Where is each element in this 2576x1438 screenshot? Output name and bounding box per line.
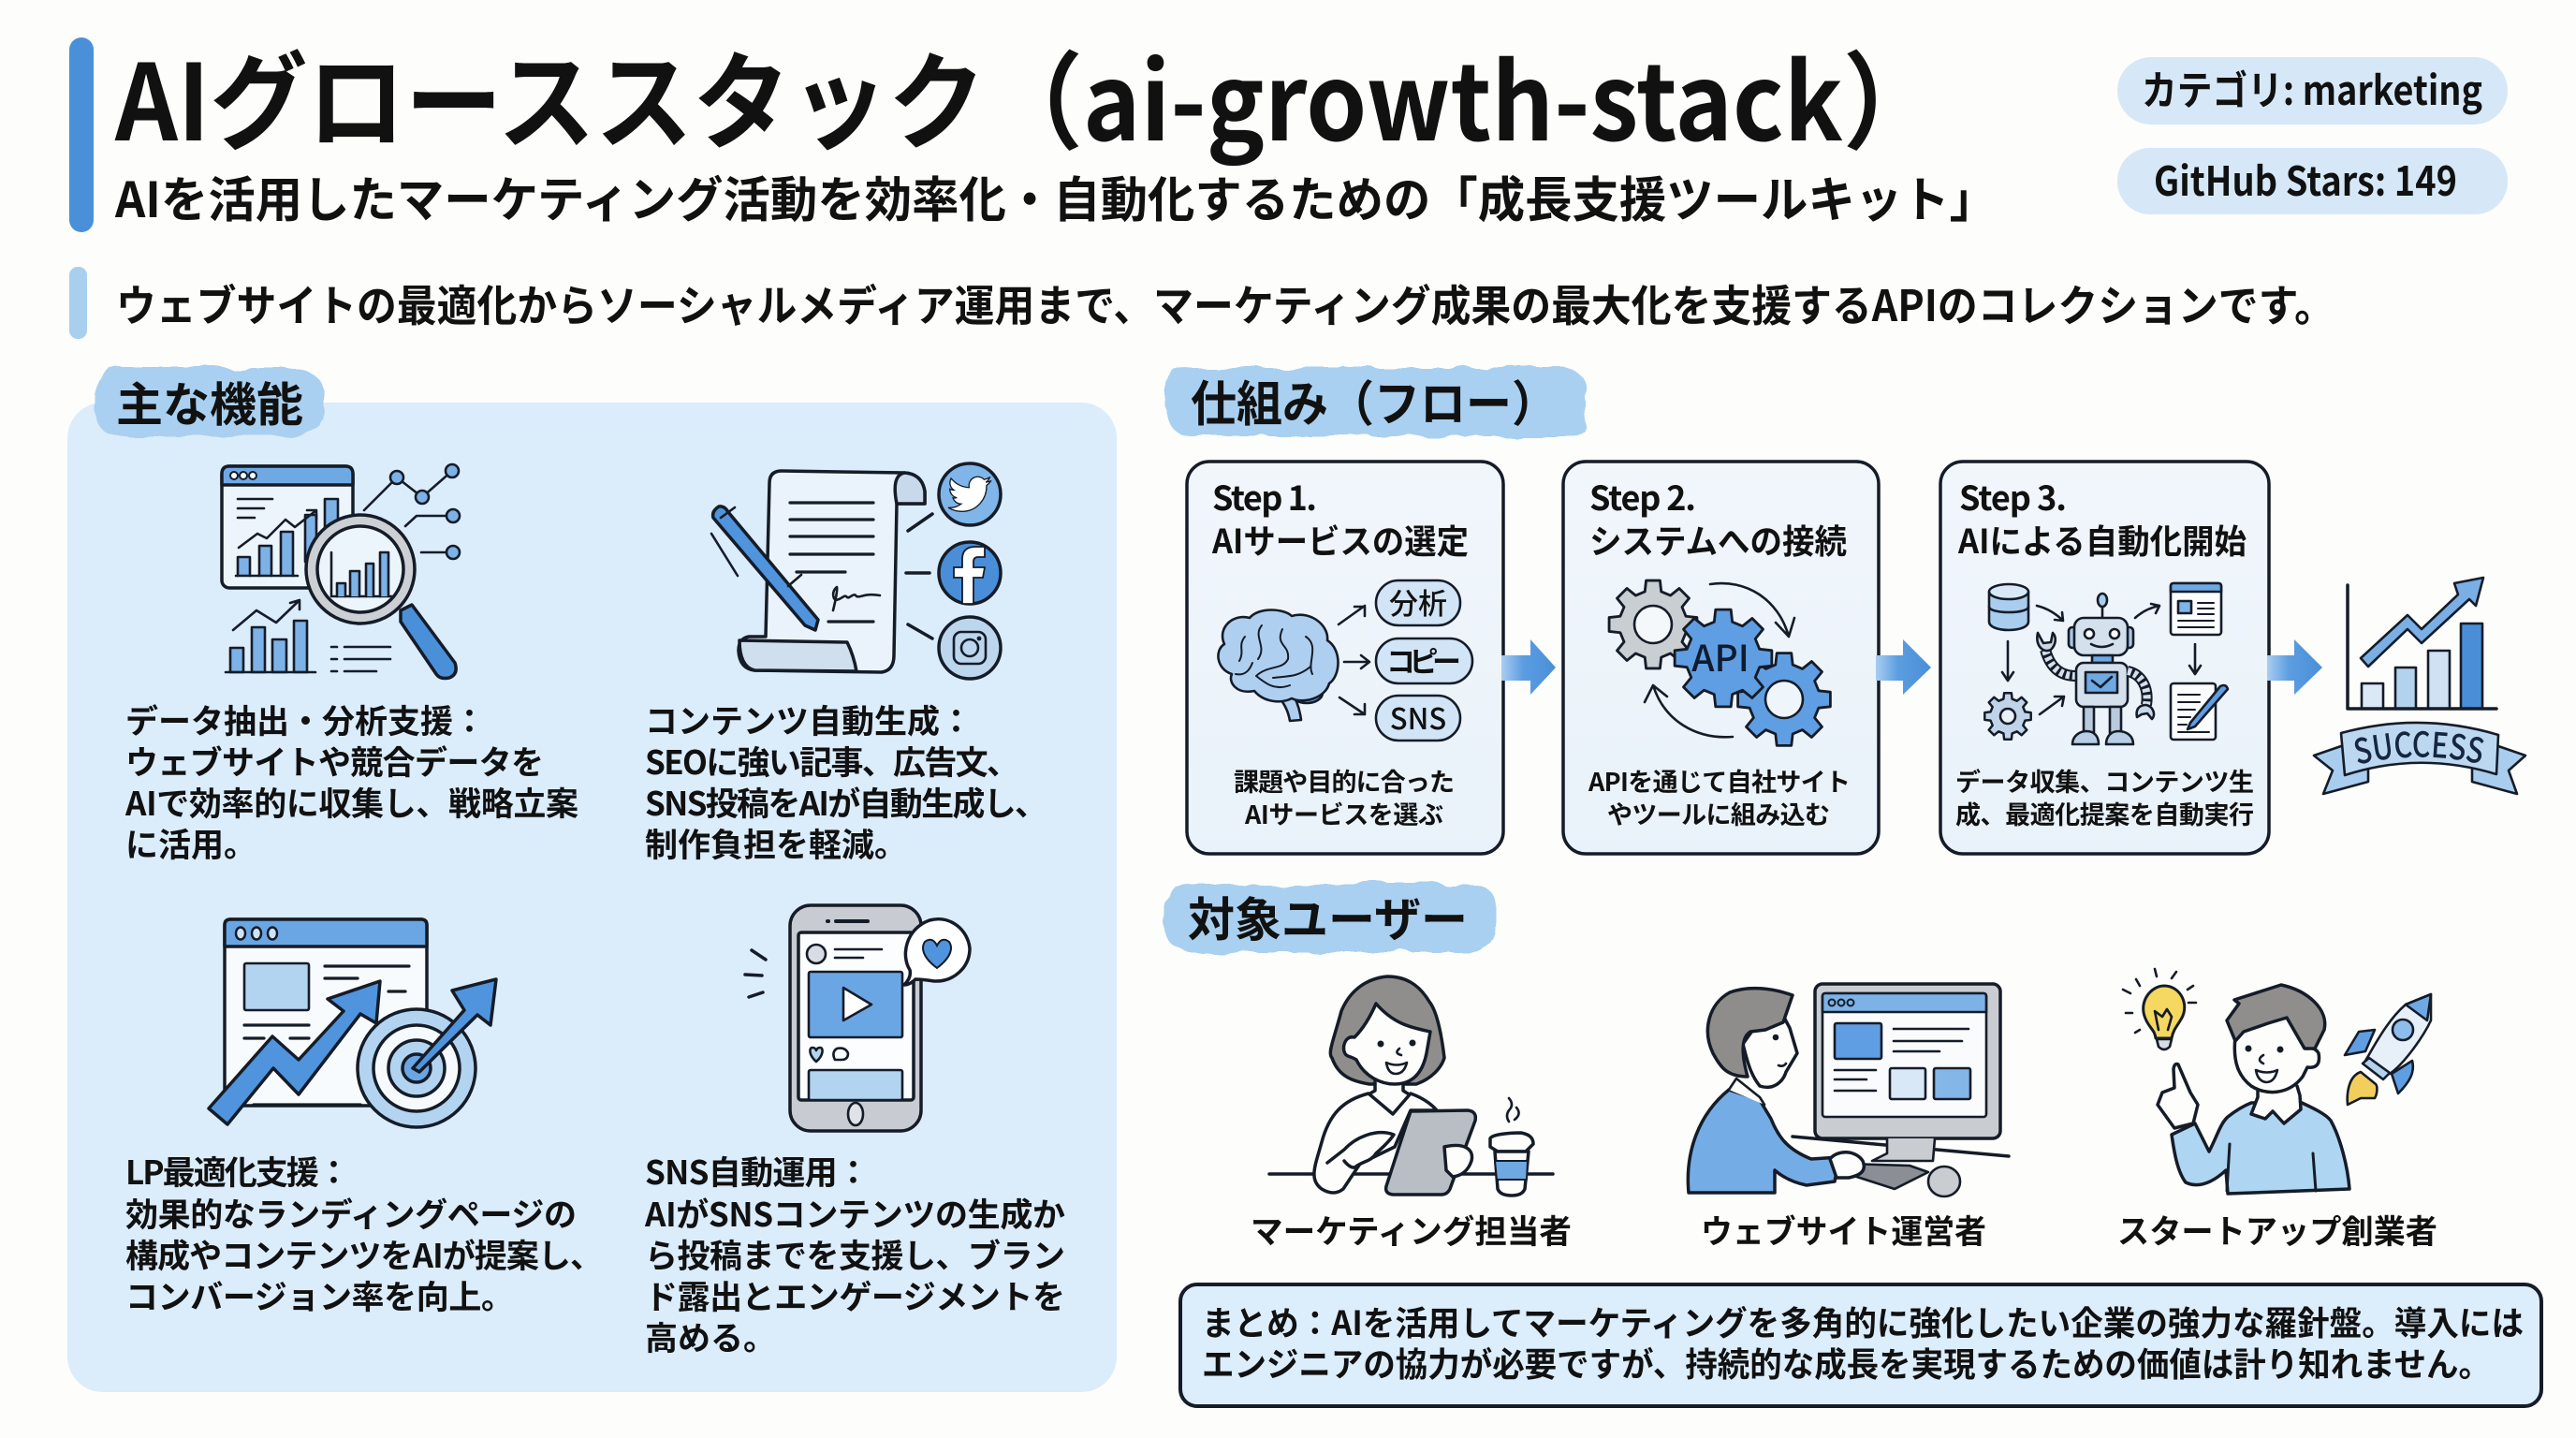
callout: summary: まとめ：AIを活用してマーケティングを多角的に強化したい企業の強力な羅針盤。導入には	[1202, 1297, 2524, 1345]
arrow: step 2 to step 3	[1876, 639, 1931, 695]
feature text: data extraction: に活用。	[125, 819, 256, 867]
step 1 card	[1187, 462, 1503, 854]
icon: brain	[1218, 610, 1339, 721]
feature text: landing page optimisation: 構成やコンテンツをAIが提案し、	[125, 1230, 603, 1278]
icon: robot	[2037, 594, 2154, 744]
step 3 card: 成、最適化提案を自動実行	[1955, 795, 2254, 831]
icon: success chart	[2348, 578, 2496, 709]
user: website operator	[1688, 984, 2009, 1196]
pills: service types: SNS	[1390, 696, 1446, 738]
feature text: social media automation: 高める。	[645, 1313, 776, 1360]
description accent bar	[69, 267, 87, 339]
arrow: step 3 to success	[2267, 639, 2322, 695]
icon: API gears	[1609, 580, 1830, 745]
icon: light bulb	[2123, 969, 2196, 1049]
feature text: data extraction	[124, 696, 578, 867]
step 2 card: APIを通じて自社サイト	[1588, 762, 1851, 799]
step 3 card	[1940, 462, 2269, 854]
step 3 card: Step 3.	[1959, 472, 2067, 521]
icon: database	[1989, 584, 2028, 630]
pills: service types: 分析	[1389, 580, 1447, 623]
callout: summary: エンジニアの協力が必要ですが、持続的な成長を実現するための価値は計り知れません。	[1202, 1338, 2491, 1387]
heading: main features: 主な機能	[116, 368, 303, 435]
feature text: social media automation: ら投稿までを支援し、ブラン	[645, 1230, 1065, 1278]
arrow: step 1 to step 2	[1501, 639, 1556, 695]
feature text: landing page optimisation	[125, 1147, 603, 1319]
step 3 card: データ収集、コンテンツ生	[1955, 762, 2254, 799]
icon: social media automation	[745, 905, 970, 1131]
label: startup founder: スタートアップ創業者	[2117, 1206, 2437, 1254]
feature text: content generation: コンテンツ自動生成：	[645, 696, 973, 743]
icon: API gears: API	[1691, 630, 1749, 682]
ribbon: success	[2312, 721, 2527, 796]
step 2 card: やツールに組み込む	[1607, 795, 1830, 831]
subtitle: AIを活用したマーケティング活動を効率化・自動化するための「成長支援ツールキット」	[114, 161, 1997, 231]
label: marketing manager: マーケティング担当者	[1251, 1206, 1572, 1254]
title: AIグローススタック（ai-growth-stack）	[114, 18, 1940, 171]
title accent bar	[69, 37, 94, 232]
feature text: data extraction: AIで効率的に収集し、戦略立案	[124, 778, 578, 826]
panel: main features	[67, 368, 1117, 1392]
feature text: data extraction: ウェブサイトや競合データを	[125, 737, 544, 785]
feature text: data extraction: データ抽出・分析支援：	[125, 696, 486, 743]
icon: content generation	[711, 463, 1001, 679]
feature text: landing page optimisation: 効果的なランディングページの	[125, 1189, 577, 1237]
step 1 card: AIサービスの選定	[1211, 515, 1469, 564]
feature text: social media automation	[644, 1147, 1065, 1360]
user: marketing manager	[1269, 976, 1553, 1196]
feature text: content generation: SNS投稿をAIが自動生成し、	[645, 778, 1047, 826]
feature text: social media automation: SNS自動運用：	[645, 1147, 870, 1195]
arrows: automation flow	[2002, 604, 2201, 714]
heading: how it works: 仕組み（フロー）	[1191, 365, 1558, 435]
icon: landing page optimisation	[209, 919, 496, 1127]
icon: data analysis	[222, 464, 460, 678]
ribbon: success: SUCCESS	[2355, 730, 2484, 764]
step 1 card: Step 1.	[1212, 472, 1317, 521]
step 2 card: Step 2.	[1589, 472, 1696, 521]
step 2 card: システムへの接続	[1589, 515, 1847, 564]
feature text: landing page optimisation: コンバージョン率を向上。	[125, 1271, 514, 1319]
description: ウェブサイトの最適化からソーシャルメディア運用まで、マーケティング成果の最大化を支援するAPIのコレクションです。	[116, 272, 2334, 334]
label: website operator: ウェブサイト運営者	[1701, 1206, 1986, 1254]
pills: service types: コピー	[1386, 638, 1461, 681]
icon: document with pen	[2171, 683, 2228, 740]
heading: target users: 対象ユーザー	[1188, 883, 1468, 950]
feature text: social media automation: ド露出とエンゲージメントを	[645, 1271, 1065, 1319]
user: startup founder	[2123, 969, 2431, 1194]
feature text: content generation: SEOに強い記事、広告文、	[645, 737, 1019, 785]
step 2 card	[1563, 462, 1879, 854]
icon: rocket	[2345, 994, 2431, 1105]
badge: category: カテゴリ: marketing	[2142, 59, 2482, 117]
step 1 card: AIサービスを選ぶ	[1244, 795, 1443, 831]
pills: service types	[1339, 580, 1472, 741]
feature text: social media automation: AIがSNSコンテンツの生成か	[644, 1189, 1065, 1237]
step 3 card: AIによる自動化開始	[1957, 515, 2247, 564]
badge: github stars: GitHub Stars: 149	[2154, 150, 2457, 208]
feature text: content generation	[645, 696, 1047, 867]
icon: web document	[2171, 583, 2221, 635]
icon: small gear	[1984, 693, 2031, 740]
callout: summary	[1180, 1284, 2541, 1406]
feature text: content generation: 制作負担を軽減。	[645, 819, 907, 867]
feature text: landing page optimisation: LP最適化支援：	[125, 1147, 350, 1195]
step 1 card: 課題や目的に合った	[1234, 762, 1455, 799]
